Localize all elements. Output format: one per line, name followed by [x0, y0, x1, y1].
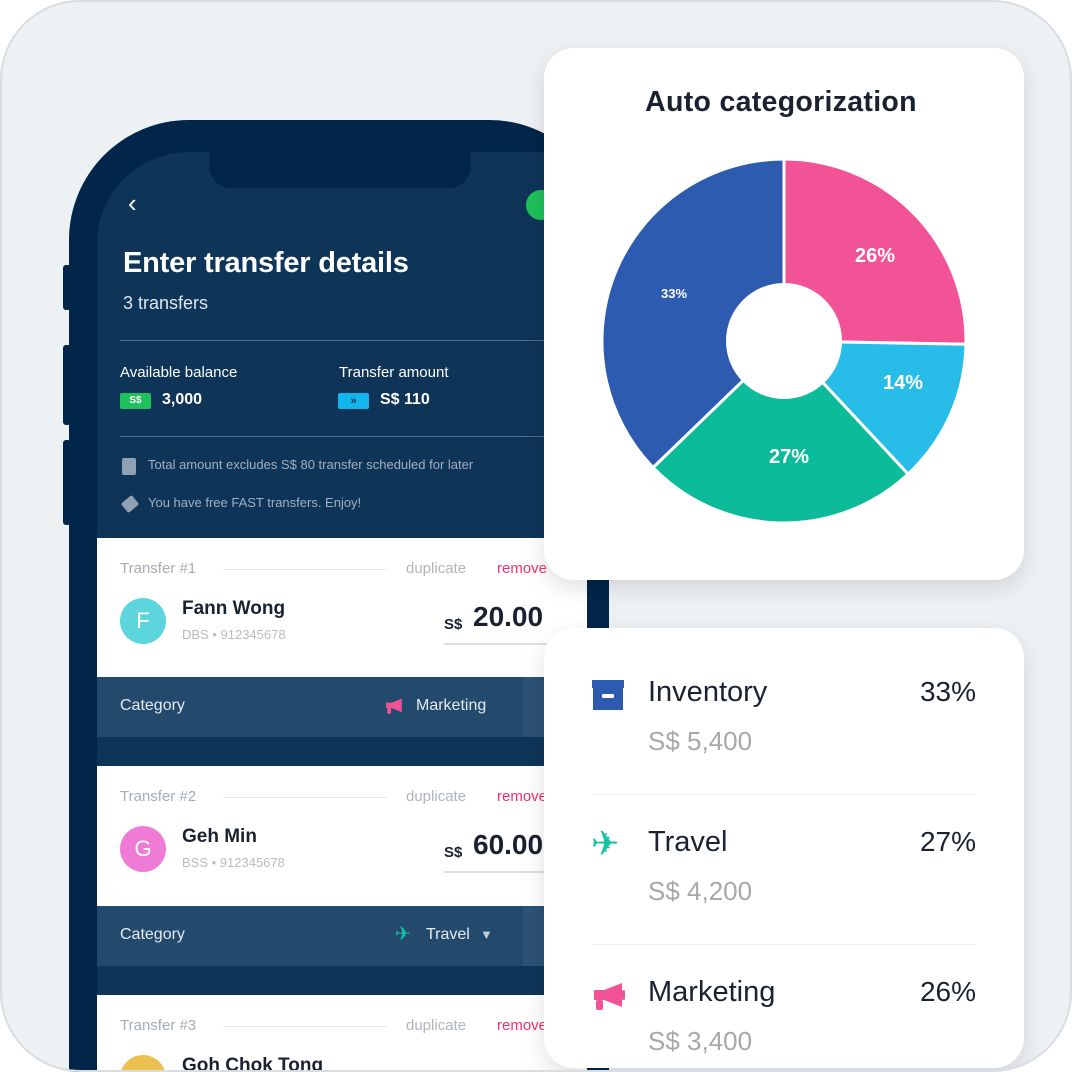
- title: Enter transfer details: [123, 247, 409, 279]
- subtitle: 3 transfers: [123, 293, 208, 313]
- pie chart: 27%: [769, 446, 809, 468]
- transfer card 3: remove: [497, 1017, 547, 1034]
- transfer card 1: duplicate: [406, 560, 466, 577]
- pie chart: 33%: [661, 286, 687, 301]
- transfer card 1: [97, 538, 587, 737]
- transfer card 2: 60.00: [473, 829, 543, 860]
- item: travel: 27%: [920, 826, 976, 857]
- transfer card 2: Transfer #2: [120, 788, 196, 805]
- back chevron: ‹: [128, 188, 137, 218]
- category bar 2: Travel: [426, 926, 470, 943]
- notch: [209, 150, 471, 188]
- transfer card 1: F: [136, 608, 150, 633]
- category bar 1: Category: [120, 697, 185, 714]
- item: inventory: 33%: [920, 676, 976, 707]
- phone body: [69, 120, 609, 1072]
- transfer card 1: S$: [444, 616, 462, 633]
- item: marketing: 26%: [920, 976, 976, 1007]
- panel: pie chart card: [544, 48, 1024, 580]
- transfer card 1: 20.00: [473, 601, 543, 632]
- category bar 1: Marketing: [416, 697, 486, 714]
- transfer amount block: Transfer amount: [339, 364, 448, 381]
- transfer card 2: BSS • 912345678: [182, 855, 285, 870]
- transfer card 1: Fann Wong: [182, 598, 285, 619]
- transfer card 2: S$: [444, 844, 462, 861]
- category bar 2: ✈: [395, 924, 411, 945]
- item: inventory: [592, 676, 976, 756]
- category bar 2: Category: [120, 926, 185, 943]
- panel: category list card: [544, 628, 1024, 1068]
- pie chart: 26%: [855, 245, 895, 267]
- item: inventory: Inventory: [648, 676, 767, 708]
- category bar 1: [97, 677, 587, 737]
- transfer card 3: [97, 995, 587, 1072]
- side buttons: [63, 265, 71, 310]
- balance block: S$: [129, 395, 142, 406]
- item: marketing: [594, 976, 976, 1056]
- balance block: [120, 364, 237, 409]
- note 2: You have free FAST transfers. Enjoy!: [148, 495, 361, 510]
- transfer amount block: S$ 110: [380, 391, 430, 408]
- phone: [63, 120, 609, 1072]
- transfer card 1: DBS • 912345678: [182, 627, 286, 642]
- transfer card 3: Transfer #3: [120, 1017, 196, 1034]
- item: travel: [591, 825, 976, 906]
- transfer card 1: remove: [497, 560, 547, 577]
- category bar 2: [97, 906, 587, 966]
- transfer card 2: [97, 766, 547, 966]
- item: inventory: S$ 5,400: [648, 726, 752, 756]
- transfer card 3: duplicate: [406, 1017, 466, 1034]
- transfer card 2: G: [134, 836, 152, 861]
- category bar 2: ▼: [480, 927, 493, 942]
- transfer card 1: Transfer #1: [120, 560, 196, 577]
- transfer amount block: [338, 364, 448, 409]
- item: marketing: Marketing: [648, 976, 775, 1008]
- item: travel: ✈: [591, 825, 620, 863]
- screen: [97, 152, 587, 1072]
- logo: [526, 190, 556, 220]
- pie chart: 14%: [883, 372, 923, 394]
- balance block: 3,000: [162, 391, 202, 408]
- transfer card 2: remove: [497, 788, 547, 805]
- item: travel: Travel: [648, 826, 728, 858]
- note 1: Total amount excludes S$ 80 transfer scheduled for later: [148, 457, 473, 472]
- item: travel: S$ 4,200: [648, 876, 752, 906]
- transfer card 2: duplicate: [406, 788, 466, 805]
- transfer amount block: »: [350, 395, 357, 407]
- balance block: Available balance: [120, 364, 237, 381]
- pie chart: [603, 160, 965, 522]
- item: marketing: S$ 3,400: [648, 1026, 752, 1056]
- chart title: Auto categorization: [645, 86, 917, 118]
- transfer card 2: Geh Min: [182, 826, 257, 847]
